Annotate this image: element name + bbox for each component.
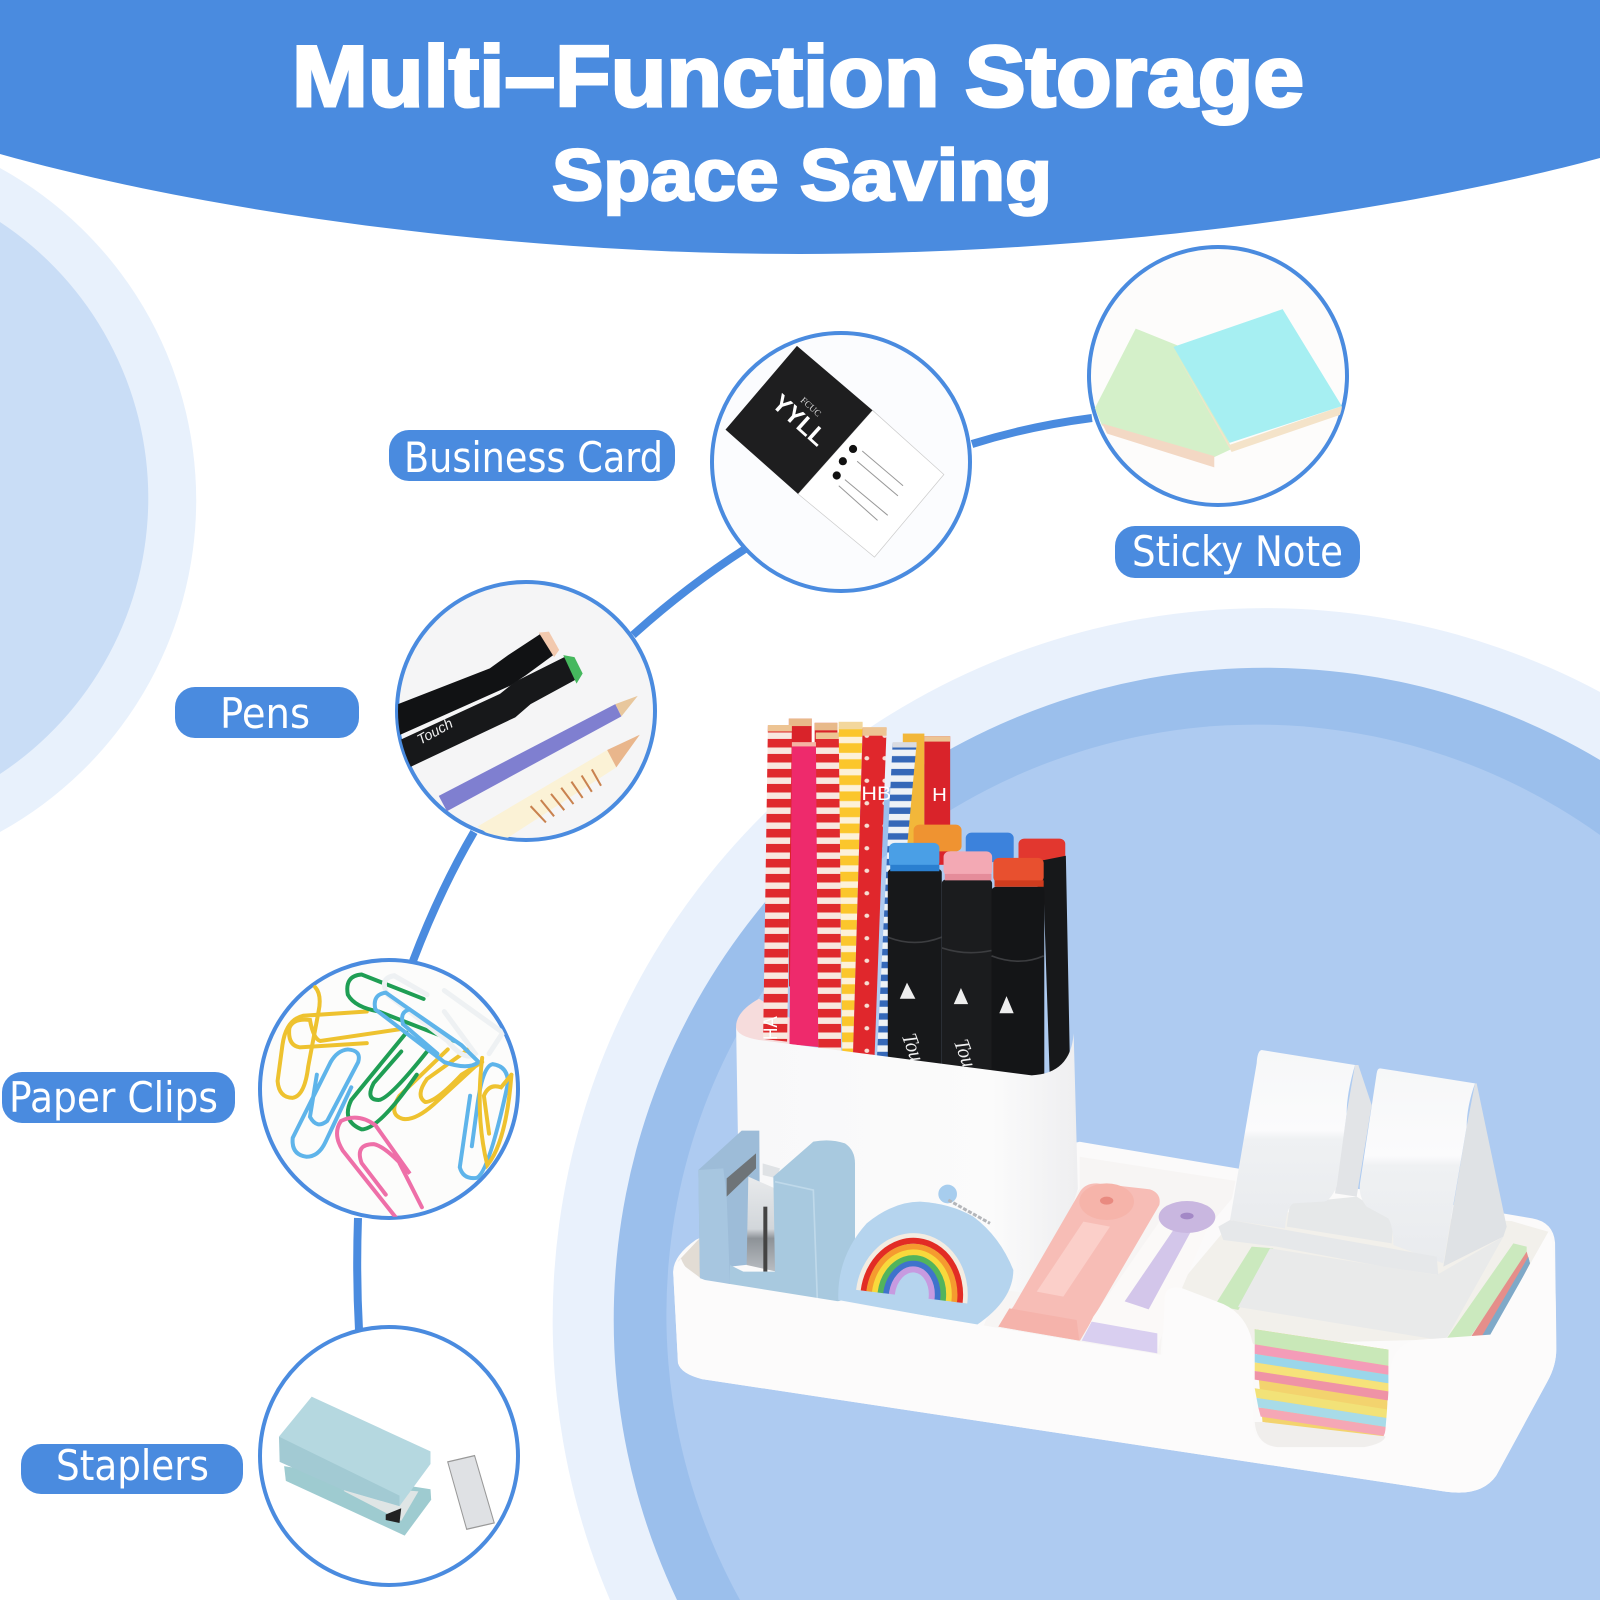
label: paper clips: Paper Clips	[9, 1073, 218, 1122]
background left circles	[0, 168, 196, 832]
tray inner wall	[984, 1157, 1236, 1356]
pens and pencils	[393, 632, 640, 843]
circle: sticky note	[1089, 247, 1347, 505]
markers: Touch	[897, 1031, 935, 1081]
pens and pencils: Touch	[415, 716, 456, 748]
green sticky pad	[1215, 1243, 1530, 1347]
stand plates	[1230, 1050, 1355, 1228]
circle: pens	[393, 582, 655, 843]
stapler and staples	[279, 1397, 494, 1536]
circle: staplers	[260, 1327, 518, 1585]
mini stapler	[698, 1131, 855, 1302]
business card: FCUC	[799, 395, 823, 419]
tape measure with rainbow	[838, 1185, 1013, 1325]
tray and pencil cup	[673, 719, 1556, 1493]
pencils: HB	[861, 783, 891, 805]
pencil cup interior	[736, 999, 804, 1050]
circle: paper clips	[260, 960, 518, 1218]
title line 2: Space Saving	[552, 136, 1052, 216]
left inner wall	[678, 1237, 703, 1280]
rainbow sticky stack	[1255, 1329, 1388, 1443]
business card	[726, 346, 944, 557]
label: sticky note: Sticky Note	[1132, 527, 1343, 576]
background right circles	[553, 608, 1600, 1600]
circle: business card	[712, 333, 970, 591]
phone stand and paper	[1215, 1050, 1530, 1347]
notes and front wall	[673, 1232, 1556, 1493]
pencils: HA	[760, 1015, 781, 1040]
markers	[888, 825, 1070, 1087]
right compartment interior	[1165, 1210, 1548, 1344]
pink correction tape	[998, 1183, 1160, 1341]
paper clips	[278, 975, 511, 1218]
compartment divider	[1167, 1202, 1239, 1288]
label: pens: Pens	[220, 689, 310, 738]
header banner	[0, 0, 1600, 254]
label: business card: Business Card	[404, 433, 663, 482]
pencil cup front	[736, 1027, 1078, 1296]
stand side folds	[1335, 1065, 1507, 1267]
label: staplers: Staplers	[56, 1441, 209, 1490]
markers: Touch	[949, 1037, 987, 1087]
title line 1: Multi–Function Storage	[292, 29, 1304, 125]
business card: YYLL	[766, 389, 831, 452]
tray silhouette	[673, 1142, 1556, 1493]
reflective sheet	[1238, 1237, 1503, 1341]
notch shadow	[1255, 1422, 1385, 1447]
tray front wall	[673, 1232, 1556, 1493]
connector lines	[357, 418, 1092, 1330]
product: desk organizer	[673, 719, 1556, 1493]
title	[292, 29, 1304, 216]
stand foot	[1287, 1197, 1393, 1243]
label: pens	[175, 687, 359, 738]
purple correction tape	[1082, 1201, 1215, 1353]
small stationery	[698, 1131, 1215, 1353]
sticky note pads	[1095, 309, 1342, 467]
stand base bar	[1218, 1220, 1438, 1275]
pencils: H	[932, 786, 947, 806]
pencils	[760, 719, 950, 1058]
